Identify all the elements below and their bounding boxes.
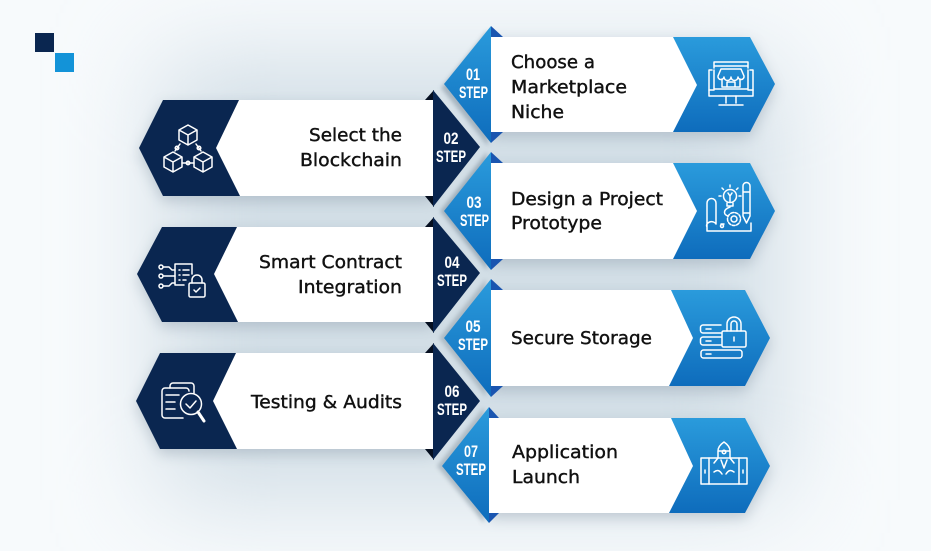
label: 06 step [437,383,467,419]
panel: step 06 testing and audits [136,343,480,460]
icon: audit clipboard and magnifier [162,383,204,421]
heading: design a project prototype: Design a Project [511,190,663,210]
label: 04 step: STEP [437,272,467,290]
label: 01 step: STEP [459,84,488,102]
heading: choose a marketplace niche [511,53,627,123]
arrow: 04 step [433,217,480,333]
label: 07 step: STEP [456,461,486,479]
icon: rocket launching from a map [701,442,747,484]
panel: step 02 select the blockchain [139,90,480,207]
heading: smart contract integration: Integration [298,278,402,298]
heading: choose a marketplace niche: Niche [511,103,564,123]
label: 03 step: 03 [466,194,482,212]
label: 05 step [458,318,488,354]
heading: secure storage: Secure Storage [511,329,652,349]
arrow: 07 step [442,407,489,523]
shadows behind blue arrows [437,30,488,523]
heading: testing and audits: Testing & Audits [250,393,402,413]
icon: prototype blueprint, bulb, gear and pencil [707,183,751,231]
logo [35,33,74,72]
label: 02 step: 02 [444,130,458,148]
icon: server with padlock [700,317,746,358]
arrow: 01 step [444,26,491,143]
heading: choose a marketplace niche: Choose a [511,53,595,73]
panel: step 01 choose a marketplace niche [444,26,775,143]
heading: choose a marketplace niche: Marketplace [511,78,627,98]
panel: step 05 secure storage [444,279,770,397]
heading: application launch: Launch [512,468,580,488]
heading: select the blockchain: Blockchain [300,151,402,171]
heading: smart contract integration: Smart Contract [259,253,402,273]
label: 02 step: STEP [436,148,466,166]
label: 01 step: 01 [466,66,480,84]
label: 01 step [459,66,488,102]
icon: blockchain cubes [164,125,212,172]
label: 07 step [456,443,486,479]
label: 07 step: 07 [464,443,478,461]
arrow: 03 step [444,152,491,270]
heading: design a project prototype [511,190,663,234]
heading: application launch [512,443,618,488]
label: 06 step: 06 [444,383,460,401]
panel: step 04 smart contract integration [137,217,480,333]
arrow: 02 step [433,90,480,207]
icon: smart contract with lock [159,264,205,297]
label: 03 step [460,194,489,230]
panel: step 07 application launch [442,407,770,523]
label: 05 step: STEP [458,336,488,354]
heading: select the blockchain [300,126,402,171]
label: 04 step [437,254,467,290]
icon: online store monitor [709,62,753,105]
heading: application launch: Application [512,443,618,463]
panel: step 03 design a project prototype [444,152,775,270]
heading: select the blockchain: Select the [309,126,402,146]
step labels [436,66,489,479]
heading: smart contract integration [259,253,402,298]
heading: design a project prototype: Prototype [511,214,602,234]
label: 04 step: 04 [444,254,460,272]
arrow: 06 step [433,343,480,460]
label: 03 step: STEP [460,212,489,230]
label: 02 step [436,130,466,166]
label: 06 step: STEP [437,401,467,419]
label: 05 step: 05 [466,318,480,336]
arrow: 05 step [444,279,491,397]
